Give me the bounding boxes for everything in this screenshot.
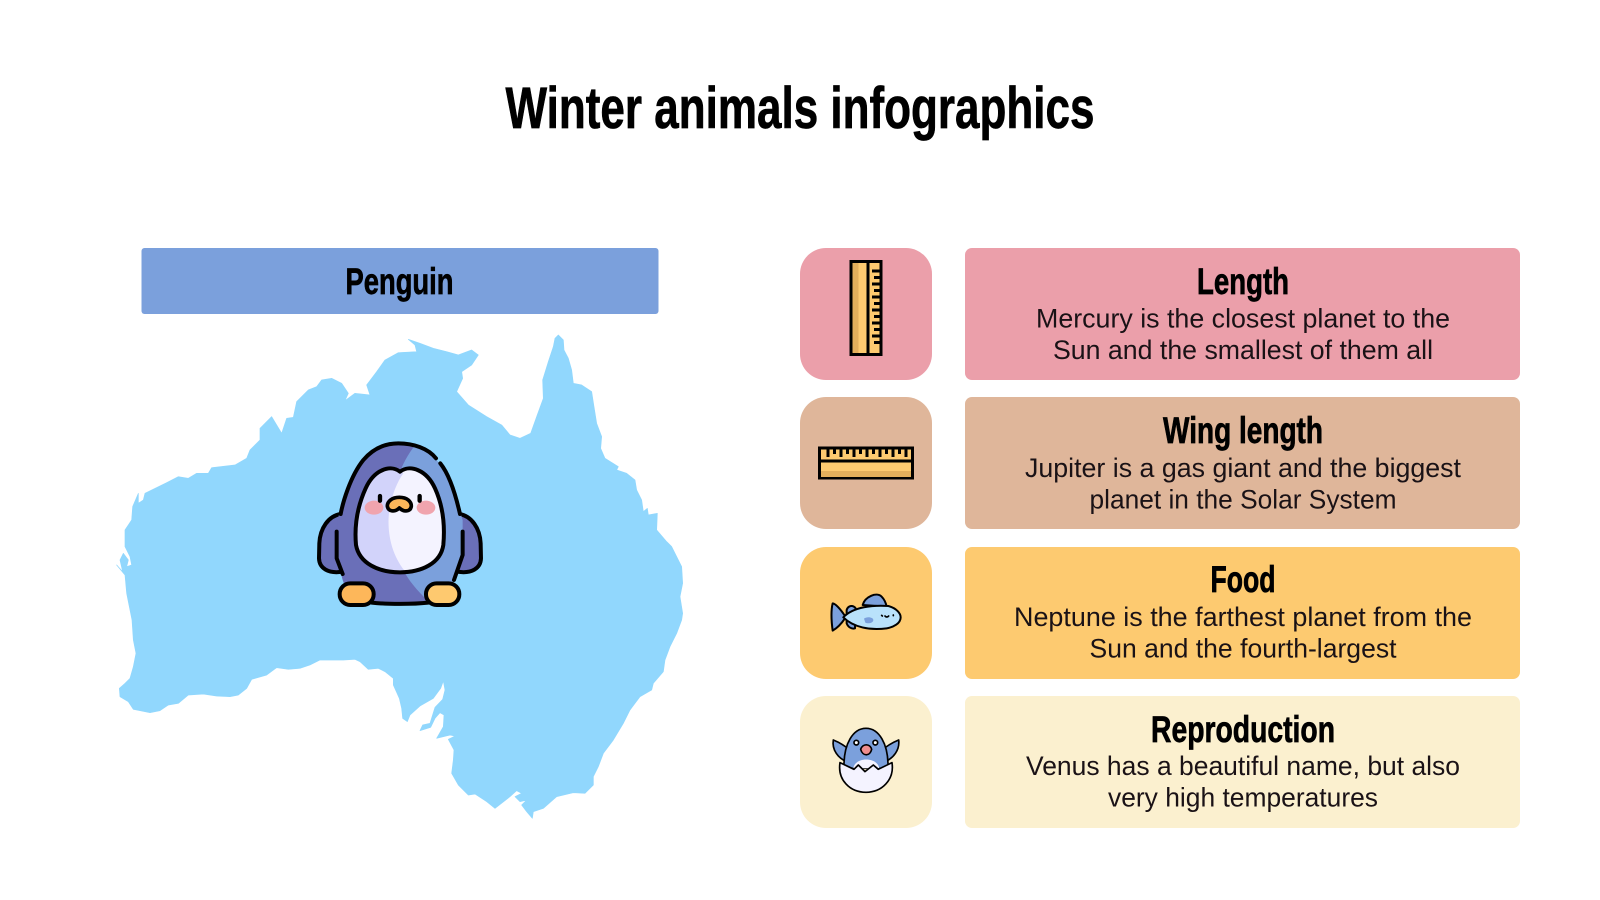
- icon: penguin: [319, 443, 481, 605]
- card row: food: Sun and the fourth-largest: [1090, 634, 1397, 664]
- card row: length: Sun and the smallest of them all: [1053, 335, 1433, 365]
- card row: wing length: Jupiter is a gas giant and the biggest: [1025, 453, 1462, 483]
- panel: penguin heading: Penguin: [346, 261, 454, 302]
- card row: wing length: planet in the Solar System: [1090, 484, 1396, 514]
- card row: food: Food: [1210, 559, 1276, 600]
- card row: food: Neptune is the farthest planet from the: [1014, 602, 1472, 632]
- card row: reproduction: very high temperatures: [1108, 782, 1378, 812]
- panel: food text: [965, 547, 1520, 679]
- title: Winter animals infographics: [506, 76, 1094, 141]
- map: Australia: [117, 335, 683, 818]
- card row: length: Mercury is the closest planet to the: [1036, 304, 1450, 334]
- icon: horizontal ruler: [819, 448, 913, 478]
- icon tile: cream: [800, 696, 932, 828]
- icon tile: pink: [800, 248, 932, 380]
- panel: length text: [965, 248, 1520, 380]
- card row: length: [800, 248, 1520, 380]
- card row: wing length: Wing length: [1163, 410, 1323, 451]
- icon: vertical ruler: [851, 261, 881, 355]
- icon tile: tan: [800, 397, 932, 529]
- icon: chick in egg: [833, 728, 899, 792]
- panel: penguin heading: [142, 248, 658, 314]
- card row: reproduction: Reproduction: [1151, 709, 1335, 750]
- panel: reproduction text: [965, 696, 1520, 828]
- card row: reproduction: Venus has a beautiful name, but also: [1026, 751, 1460, 781]
- card row: length: Length: [1197, 261, 1289, 302]
- icon: fish: [832, 595, 901, 631]
- icon tile: yellow: [800, 547, 932, 679]
- card row: reproduction: [800, 696, 1520, 828]
- card row: wing length: [800, 397, 1520, 529]
- panel: wing length text: [965, 397, 1520, 529]
- card row: food: [800, 547, 1520, 679]
